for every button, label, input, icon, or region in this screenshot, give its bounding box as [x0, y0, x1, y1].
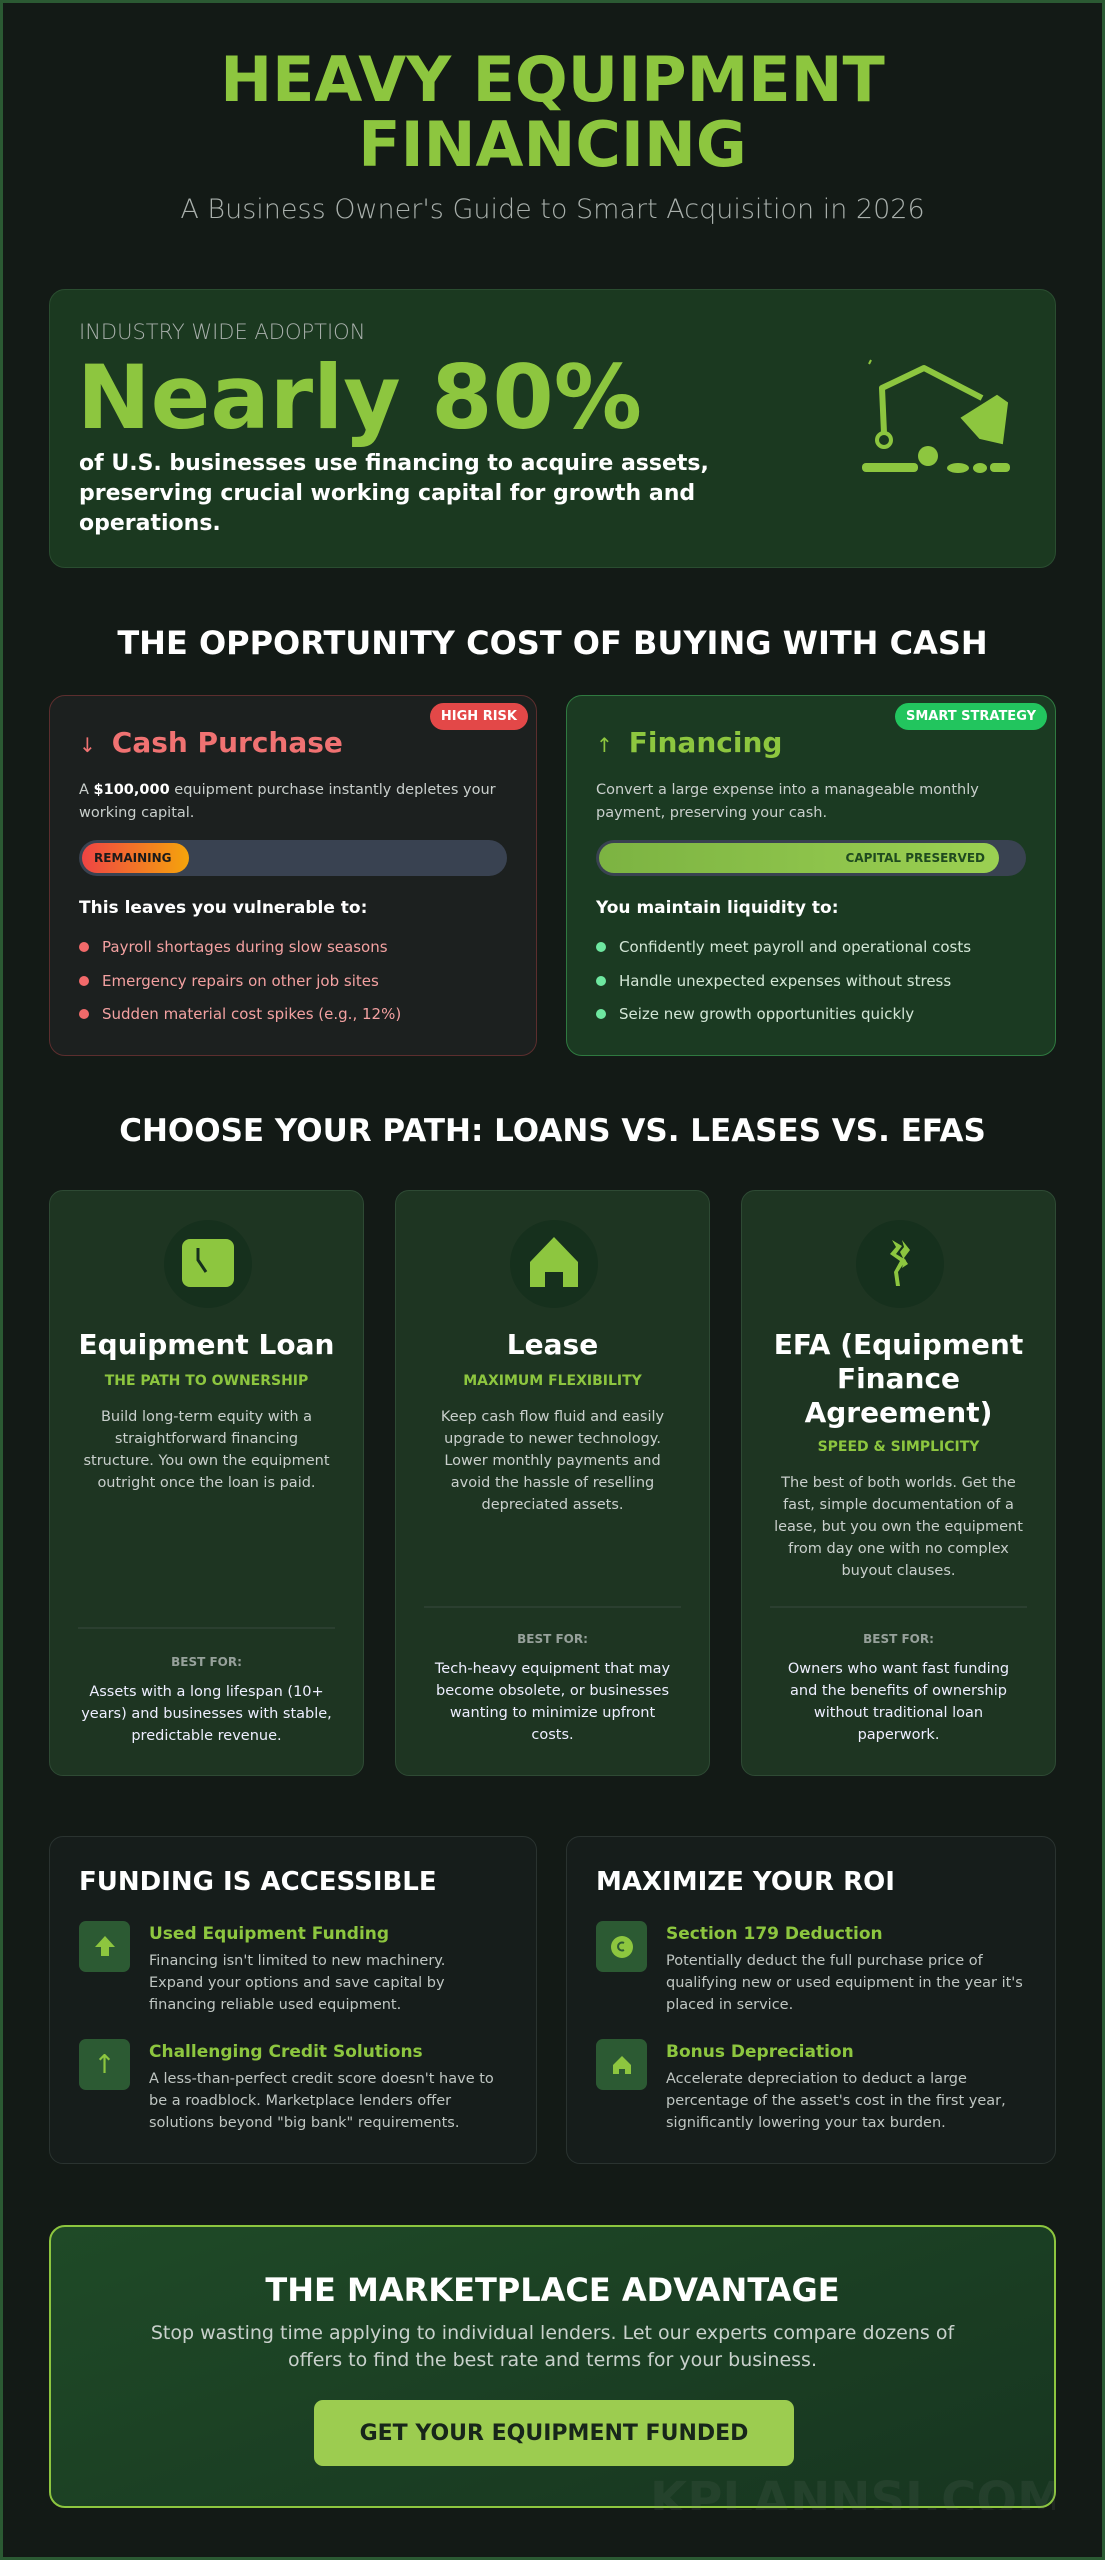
lease description: Keep cash flow fluid and easily upgrade to newer technology. Lower monthly payments and avoid the hassle of reselling depreciated assets.: [441, 1409, 664, 1513]
financing heading: ↑ Financing: [596, 726, 782, 759]
bar: remaining: REMAINING: [94, 851, 172, 865]
EFA best for: BEST FOR:: [863, 1632, 934, 1646]
EFA subtitle: SPEED & SIMPLICITY: [818, 1439, 979, 1455]
risk list: Emergency repairs on other job sites: [102, 972, 379, 990]
icon: clock: [164, 1220, 252, 1308]
panel: lease: [395, 1190, 710, 1776]
cash description: A $100,000 equipment purchase instantly depletes your working capital.: [79, 782, 496, 821]
subtitle: A Business Owner's Guide to Smart Acquisition in 2026: [180, 194, 925, 225]
item: bonus depreciation: Bonus Depreciation: [666, 2042, 854, 2062]
cta text: [151, 2322, 955, 2371]
title: FINANCING: [358, 108, 747, 181]
panel: funding is accessible: [49, 1836, 537, 2164]
lease title: Lease: [507, 1328, 598, 1361]
risk list: Sudden material cost spikes (e.g., 12%): [102, 1005, 401, 1023]
item: section 179: Section 179 Deduction: [666, 1924, 883, 1944]
benefits list: Seize new growth opportunities quickly: [619, 1005, 914, 1023]
item: credit solutions: ↑: [94, 2050, 115, 2080]
lease subtitle: MAXIMUM FLEXIBILITY: [463, 1373, 642, 1389]
badge: smart strategy: SMART STRATEGY: [906, 709, 1036, 724]
cash heading: ↓ Cash Purchase: [79, 726, 343, 759]
hero text: of U.S. businesses use financing to acquire assets, preserving crucial working capital for growth and operations.: [79, 451, 709, 536]
title: [220, 43, 885, 181]
panel: marketplace advantage CTA: [49, 2225, 1056, 2508]
panel: maximize roi: [566, 1836, 1056, 2164]
item: credit solutions: Challenging Credit Solutions: [149, 2042, 423, 2062]
liquidity heading: You maintain liquidity to:: [596, 898, 838, 918]
loan best for: BEST FOR:: [171, 1655, 242, 1669]
panel: lease: Tech-heavy equipment that may become obsolete, or businesses wanting to minimize upfront costs.: [435, 1661, 670, 1743]
bar: remaining: [79, 840, 507, 876]
risk list: Payroll shortages during slow seasons: [102, 938, 388, 956]
vulnerable heading: This leaves you vulnerable to:: [79, 898, 367, 918]
panel: cash purchase: [49, 695, 537, 1056]
item: credit solutions: A less-than-perfect credit score doesn't have to be a roadblock. Marketplace lenders offer solutions beyond "big bank" requirements.: [149, 2071, 494, 2131]
roi heading: MAXIMIZE YOUR ROI: [596, 1867, 895, 1897]
benefits list: [596, 938, 971, 1023]
item: used equipment: [79, 1921, 445, 2013]
item: used equipment: Used Equipment Funding: [149, 1924, 389, 1944]
hero stat card: [49, 289, 1056, 568]
heading: opportunity cost: THE OPPORTUNITY COST OF BUYING WITH CASH: [117, 624, 988, 662]
EFA title: EFA (Equipment Finance Agreement): [774, 1328, 1023, 1429]
item: bonus depreciation: [596, 2039, 1006, 2131]
title: HEAVY EQUIPMENT: [220, 43, 885, 116]
hero number: Nearly 80%: [77, 346, 642, 449]
cta button: GET YOUR EQUIPMENT FUNDED: [360, 2420, 748, 2446]
risk list: [79, 938, 401, 1023]
icon: excavator: [862, 360, 1010, 473]
bar: capital preserved: CAPITAL PRESERVED: [846, 851, 985, 865]
lease best for: BEST FOR:: [517, 1632, 588, 1646]
item: credit solutions: [79, 2039, 494, 2131]
icon: house: [510, 1220, 598, 1308]
financing description: Convert a large expense into a manageable monthly payment, preserving your cash.: [596, 782, 979, 821]
badge: high risk: [430, 703, 528, 730]
benefits list: Confidently meet payroll and operational costs: [619, 938, 971, 956]
funding heading: FUNDING IS ACCESSIBLE: [79, 1867, 437, 1897]
badge: high risk: HIGH RISK: [441, 709, 517, 724]
item: section 179: Potentially deduct the full purchase price of qualifying new or used equipment in the year it's placed in service.: [666, 1953, 1023, 2013]
panel: financing: [566, 695, 1056, 1056]
cta text: offers to find the best rate and terms for your business.: [288, 2349, 817, 2371]
item: used equipment: Financing isn't limited to new machinery. Expand your options and save capital by financing reliable used equipment.: [149, 1953, 445, 2013]
item: bonus depreciation: Accelerate depreciation to deduct a large percentage of the asset's cost in the first year, significantly lowering your tax burden.: [666, 2071, 1006, 2131]
icon: flame: [856, 1220, 944, 1308]
benefits list: Handle unexpected expenses without stress: [619, 972, 951, 990]
badge: smart strategy: [895, 703, 1047, 730]
panel: equipment loan: Assets with a long lifespan (10+ years) and businesses with stable, predictable revenue.: [81, 1684, 332, 1744]
panel: EFA: Owners who want fast funding and the benefits of ownership without traditional loan paperwork.: [788, 1661, 1009, 1743]
loan subtitle: THE PATH TO OWNERSHIP: [105, 1373, 308, 1389]
hero label: INDUSTRY WIDE ADOPTION: [79, 320, 365, 344]
item: section 179: [596, 1921, 1023, 2013]
loan description: Build long-term equity with a straightforward financing structure. You own the equipment outright once the loan is paid.: [83, 1409, 330, 1491]
bar: capital preserved: [596, 840, 1026, 876]
cta heading: THE MARKETPLACE ADVANTAGE: [265, 2271, 840, 2309]
cta text: Stop wasting time applying to individual lenders. Let our experts compare dozens of: [151, 2322, 954, 2344]
panel: EFA: [741, 1190, 1056, 1776]
loan title: Equipment Loan: [79, 1328, 334, 1361]
panel: equipment loan: [49, 1190, 364, 1776]
cta button: [314, 2400, 794, 2466]
heading: choose your path: CHOOSE YOUR PATH: LOANS VS. LEASES VS. EFAS: [119, 1113, 986, 1149]
EFA description: The best of both worlds. Get the fast, simple documentation of a lease, but you own the equipment from day one with no complex buyout clauses.: [774, 1475, 1023, 1579]
